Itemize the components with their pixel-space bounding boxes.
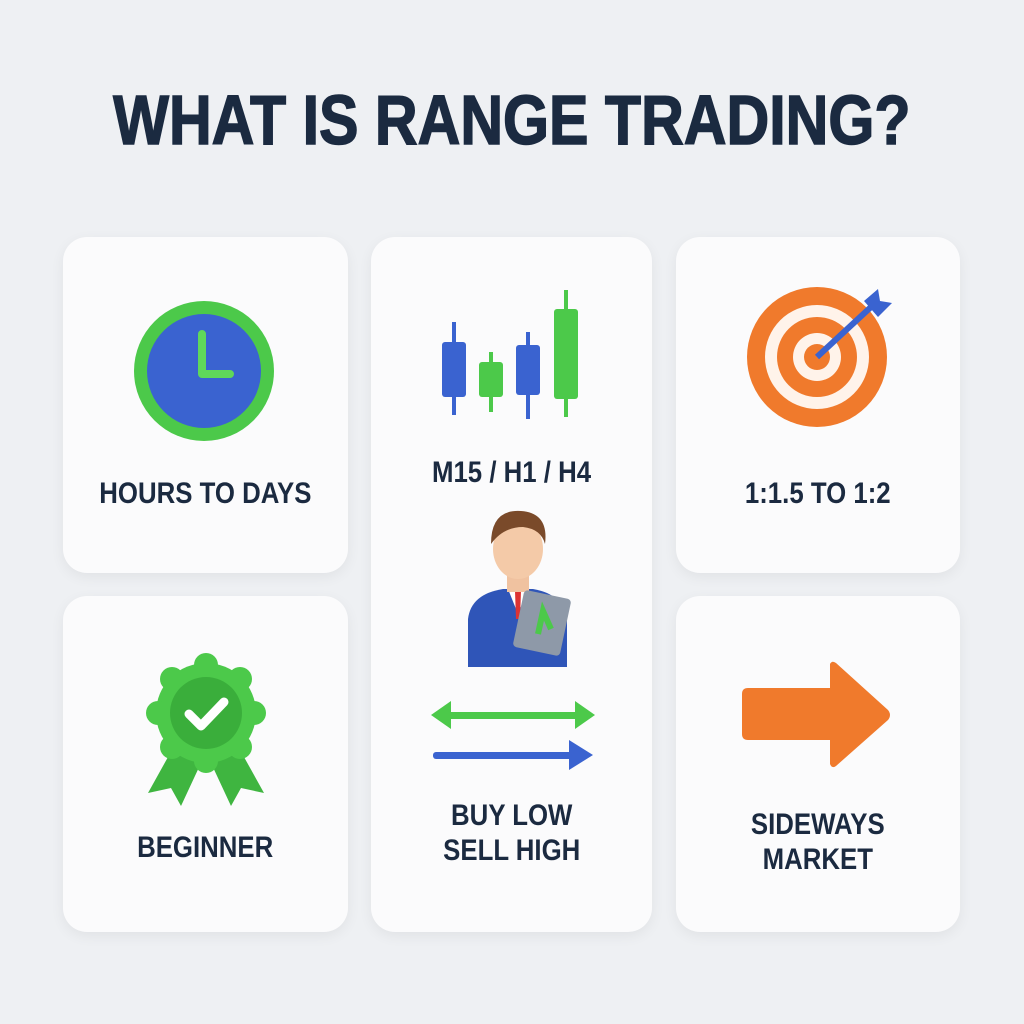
label: SELL HIGH — [443, 834, 580, 867]
panel: beginner — [63, 596, 348, 932]
label: HOURS TO DAYS — [99, 477, 312, 510]
icon: double arrows — [431, 701, 595, 770]
icon: target — [747, 287, 892, 427]
icon: candlesticks — [442, 290, 578, 419]
panel: timeframes and strategy — [371, 237, 652, 932]
label — [443, 799, 580, 867]
panel: hours to days — [63, 237, 348, 573]
icon: badge — [146, 653, 266, 806]
label: BEGINNER — [137, 831, 274, 864]
label: SIDEWAYS — [751, 808, 885, 841]
icon: clock — [134, 301, 274, 441]
label: BUY LOW — [451, 799, 572, 832]
label — [751, 808, 885, 876]
label: 1:1.5 TO 1:2 — [745, 477, 891, 510]
icon: trader — [468, 510, 571, 667]
title: WHAT IS RANGE TRADING? — [113, 81, 911, 159]
icon: orange arrow — [742, 662, 890, 768]
panel: sideways market — [676, 596, 960, 932]
label: MARKET — [763, 843, 873, 876]
label: M15 / H1 / H4 — [432, 456, 591, 489]
panel: risk reward — [676, 237, 960, 573]
